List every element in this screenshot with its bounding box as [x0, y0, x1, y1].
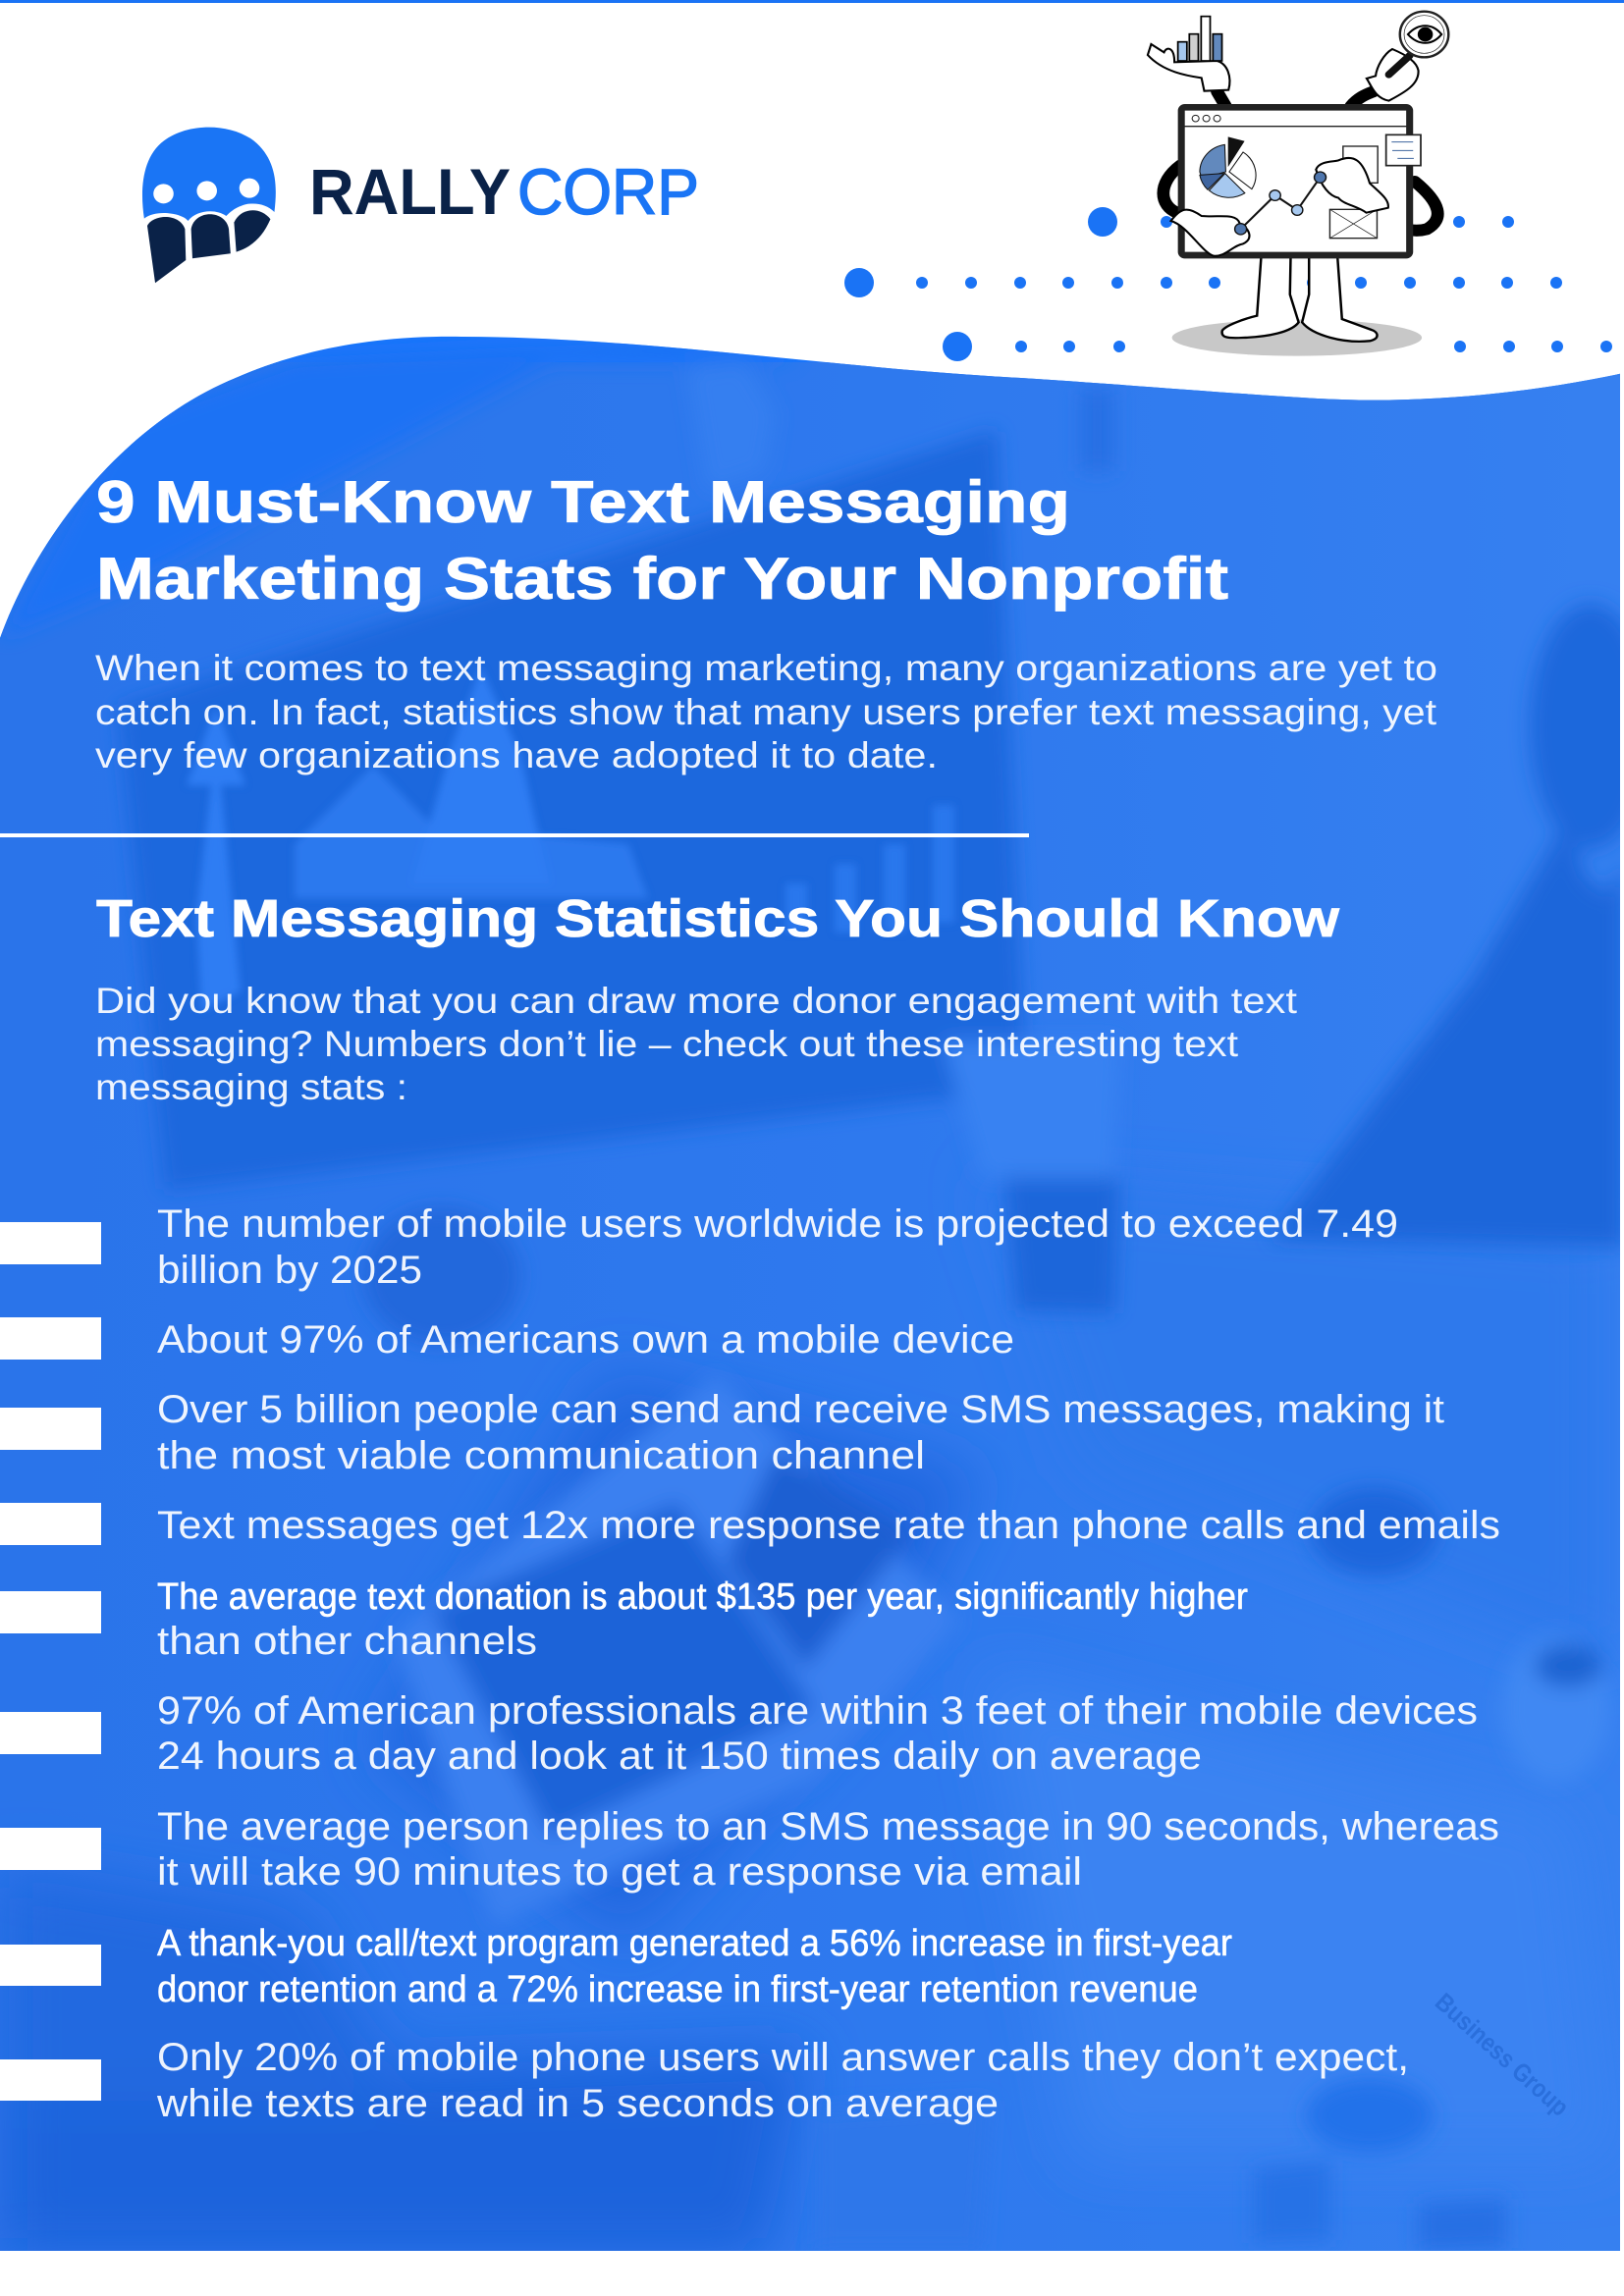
stat 1: The number of mobile users worldwide is projected to exceed 7.49 — [157, 1202, 1398, 1246]
stat 7: The average person replies to an SMS message in 90 seconds, whereas — [157, 1805, 1499, 1848]
coffee cup — [1502, 1634, 1610, 1782]
stat 3: Over 5 billion people can send and receive SMS messages, making it — [157, 1388, 1444, 1431]
section intro paragraph: messaging stats : — [95, 1067, 407, 1107]
logo wordmark — [309, 155, 699, 228]
shadow — [1172, 319, 1422, 356]
intro paragraph: When it comes to text messaging marketing, many organizations are yet to — [95, 648, 1437, 688]
section intro paragraph — [95, 981, 1298, 1107]
top blue line — [0, 0, 1624, 3]
illustration: dashboard character — [1148, 12, 1448, 356]
upper left wedge — [0, 339, 805, 638]
person head — [363, 1207, 520, 1345]
icon: magnifying glass with eye — [1388, 12, 1448, 75]
stat 8: donor retention and a 72% increase in first-year retention revenue — [157, 1969, 1198, 2010]
monitor — [118, 430, 1026, 1190]
blue tablet — [1311, 1487, 1438, 1575]
stat 3: the most viable communication channel — [157, 1434, 925, 1477]
stat 9: while texts are read in 5 seconds on average — [156, 2082, 999, 2125]
icon: pie chart — [1200, 137, 1256, 197]
section intro paragraph: messaging? Numbers don’t lie – check out these interesting text — [95, 1024, 1239, 1064]
icon: logo speech bubble — [142, 128, 276, 283]
intro paragraph: very few organizations have adopted it to date. — [95, 735, 938, 775]
laptop — [393, 1374, 962, 1926]
stat 7 — [0, 1805, 1499, 1894]
mug and hand — [1005, 1178, 1119, 1313]
monitor chart details — [187, 667, 954, 1011]
logo wordmark: CORP — [517, 155, 699, 228]
person right — [1530, 604, 1624, 849]
lower right document — [1306, 2078, 1434, 2153]
divider rule — [0, 833, 1029, 837]
stat 6 — [0, 1689, 1478, 1778]
icon: line chart — [1241, 178, 1321, 229]
icon: arms — [1164, 91, 1437, 231]
large soft tones — [0, 1178, 1610, 2258]
icon: legs — [1222, 257, 1299, 338]
phone — [815, 1463, 882, 1677]
stat 3 — [0, 1388, 1444, 1477]
icon: mini bar chart — [1178, 17, 1222, 61]
stat 8 — [0, 1923, 1232, 2010]
logo wordmark: RALLY — [309, 155, 511, 228]
intro paragraph: catch on. In fact, statistics show that many users prefer text messaging, yet — [95, 692, 1437, 732]
icon: hands — [1148, 44, 1419, 256]
photo label: business group: Business Group — [1430, 1987, 1575, 2122]
stat 9 — [0, 2036, 1409, 2125]
stat 7: it will take 90 minutes to get a response via email — [157, 1850, 1082, 1894]
title: 9 Must-Know Text Messaging — [96, 469, 1070, 535]
stat 2: About 97% of Americans own a mobile device — [157, 1318, 1014, 1362]
stat 4: Text messages get 12x more response rate than phone calls and emails — [157, 1504, 1500, 1547]
dot pattern — [844, 207, 1612, 361]
stat 5: than other channels — [157, 1620, 537, 1663]
stat 5 — [0, 1576, 1248, 1663]
intro paragraph — [95, 648, 1437, 775]
right edge strip — [1620, 373, 1624, 2258]
stat 1: billion by 2025 — [157, 1249, 422, 1292]
icon: envelope — [1329, 209, 1377, 239]
stat 6: 97% of American professionals are within 3 feet of their mobile devices — [157, 1689, 1478, 1733]
icon: browser window — [1181, 107, 1410, 255]
icon: document cards — [1343, 146, 1378, 183]
stat 9: Only 20% of mobile phone users will answer calls they don’t expect, — [157, 2036, 1409, 2079]
stat 6: 24 hours a day and look at it 150 times daily on average — [157, 1735, 1202, 1778]
stat 1 — [0, 1202, 1398, 1292]
section intro paragraph: Did you know that you can draw more donor engagement with text — [95, 981, 1298, 1021]
section heading: Text Messaging Statistics You Should Know — [96, 889, 1340, 948]
stat list — [0, 1202, 1500, 2125]
stat 5: The average text donation is about $135 per year, significantly higher — [157, 1576, 1248, 1618]
title: Marketing Stats for Your Nonprofit — [96, 546, 1228, 612]
stat 8: A thank-you call/text program generated a 56% increase in first-year — [157, 1923, 1232, 1964]
logo — [142, 128, 699, 283]
title — [96, 469, 1228, 612]
